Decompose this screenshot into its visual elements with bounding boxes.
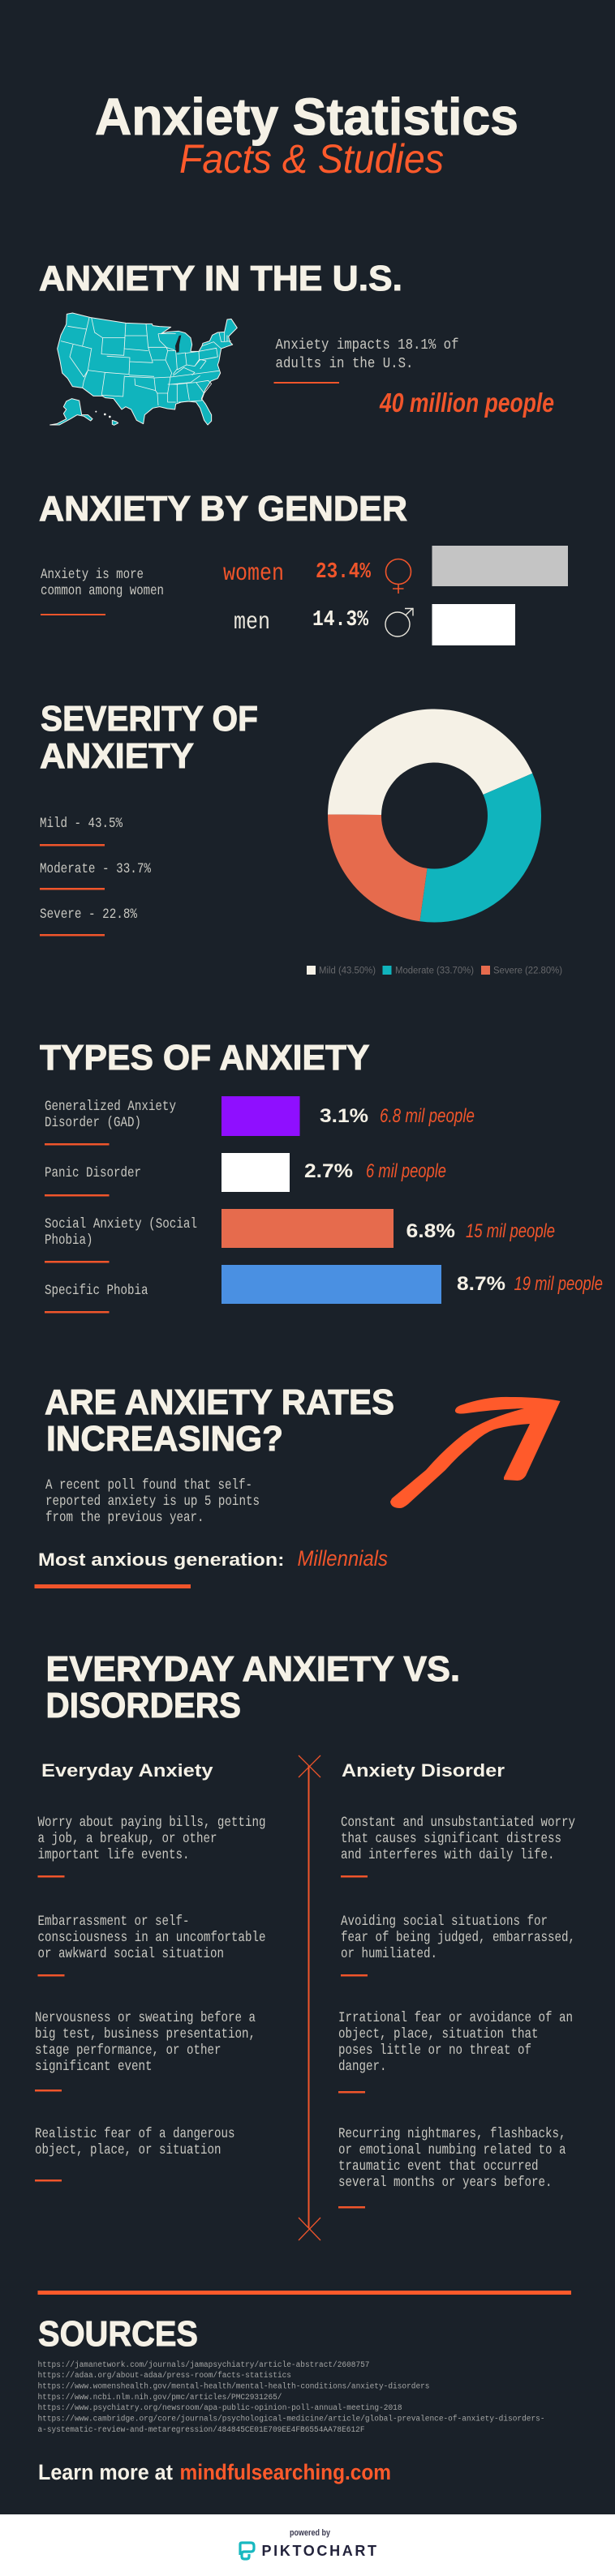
title: Facts & Studies xyxy=(179,136,444,182)
right item 1: that causes significant distress xyxy=(341,1831,561,1847)
left item 3: stage performance, or other xyxy=(35,2042,221,2059)
footer band: PIKTOCHART xyxy=(261,2543,376,2559)
type: social anxiety: 6.8% xyxy=(406,1220,455,1242)
right item 2: Avoiding social situations for xyxy=(341,1914,548,1930)
left item 4: Realistic fear of a dangerous xyxy=(35,2126,235,2142)
left item 3 xyxy=(35,2010,256,2092)
chart legend: Severe (22.80%) xyxy=(493,967,562,976)
type: specific phobia xyxy=(45,1265,603,1314)
heading: severity of anxiety: ANXIETY xyxy=(40,736,194,776)
sources list: https://www.womenshealth.gov/mental-health/mental-health-conditions/anxiety-disorders xyxy=(37,2382,430,2392)
left item 3: big test, business presentation, xyxy=(35,2026,256,2042)
type: GAD xyxy=(45,1096,475,1145)
type: specific phobia: Specific Phobia xyxy=(45,1283,148,1299)
type: GAD: Generalized Anxiety xyxy=(45,1099,176,1115)
right item 3 xyxy=(338,2010,573,2094)
heading: are anxiety rates increasing xyxy=(45,1382,394,1459)
men row xyxy=(234,604,515,645)
left item 1: Worry about paying bills, getting xyxy=(37,1815,266,1831)
left item 4: object, place, or situation xyxy=(35,2142,221,2158)
text block: recent poll: from the previous year. xyxy=(45,1510,204,1526)
type: panic disorder: Panic Disorder xyxy=(45,1165,141,1181)
footer band xyxy=(0,2514,615,2576)
column headings: Everyday Anxiety xyxy=(41,1760,213,1781)
text block: recent poll: reported anxiety is up 5 points xyxy=(45,1494,260,1510)
icon: female symbol xyxy=(386,559,411,594)
right item 3: poses little or no threat of xyxy=(338,2042,531,2059)
text block: recent poll: A recent poll found that self- xyxy=(45,1477,252,1494)
left item 2: Embarrassment or self- xyxy=(37,1914,190,1930)
sources list: a-systematic-review-and-metaregression/484845CE01E709EE4FB6554AA78E612F xyxy=(37,2425,365,2435)
type: specific phobia: 8.7% xyxy=(457,1273,505,1295)
heading: everyday anxiety vs. disorders xyxy=(45,1649,460,1725)
text block: gender note: Anxiety is more xyxy=(41,567,144,583)
right item 4: Recurring nightmares, flashbacks, xyxy=(338,2126,566,2142)
text block: anxiety impact: adults in the U.S. xyxy=(276,355,414,372)
icon: piktochart logo xyxy=(240,2543,254,2559)
most anxious generation xyxy=(34,1546,388,1588)
title: Anxiety Statistics xyxy=(95,88,518,146)
heading: severity of anxiety xyxy=(40,699,258,776)
sources list: https://jamanetwork.com/journals/jamapsychiatry/article-abstract/2608757 xyxy=(37,2360,370,2370)
text block: gender note xyxy=(41,567,164,615)
icon: male symbol xyxy=(385,608,413,636)
heading: everyday anxiety vs. disorders: EVERYDAY ANXIETY VS. xyxy=(45,1649,460,1689)
right item 3: danger. xyxy=(338,2059,386,2075)
heading: everyday anxiety vs. disorders: DISORDERS xyxy=(45,1686,241,1725)
icon: US map xyxy=(50,313,237,425)
left item 2: or awkward social situation xyxy=(37,1946,224,1962)
type: social anxiety: 15 mil people xyxy=(466,1220,555,1242)
type: GAD: Disorder (GAD) xyxy=(45,1115,141,1131)
sources list: https://adaa.org/about-adaa/press-room/facts-statistics xyxy=(37,2371,291,2381)
learn more link xyxy=(38,2460,391,2484)
center divider with crosses xyxy=(299,1755,320,2240)
heading: types of anxiety: TYPES OF ANXIETY xyxy=(40,1038,370,1078)
left item 1: a job, a breakup, or other xyxy=(37,1831,217,1847)
severity list xyxy=(40,816,151,936)
heading: severity of anxiety: SEVERITY OF xyxy=(41,699,258,739)
heading: are anxiety rates increasing: INCREASING? xyxy=(46,1419,283,1459)
column headings xyxy=(41,1760,505,1781)
left item 2 xyxy=(37,1914,266,1977)
type: social anxiety: Phobia) xyxy=(45,1232,92,1249)
text block: anxiety impact: Anxiety impacts 18.1% of xyxy=(276,336,459,354)
women row: 23.4% xyxy=(316,560,372,585)
right item 2: or humiliated. xyxy=(341,1946,437,1962)
left item 1 xyxy=(37,1815,266,1878)
type: social anxiety xyxy=(45,1209,555,1263)
callout: 40 million people: 40 million people xyxy=(379,388,554,418)
right item 4: or emotional numbing related to a xyxy=(338,2142,566,2158)
sources list: https://www.psychiatry.org/newsroom/apa-public-opinion-poll-annual-meeting-2018 xyxy=(37,2403,402,2413)
severity list: Severe - 22.8% xyxy=(40,907,137,923)
left item 3: Nervousness or sweating before a xyxy=(35,2010,256,2026)
men row: men xyxy=(234,609,270,636)
left item 3: significant event xyxy=(35,2059,153,2075)
text block: recent poll xyxy=(45,1477,260,1526)
right item 4 xyxy=(338,2126,566,2209)
text block: anxiety impact xyxy=(274,336,459,384)
type: GAD: 6.8 mil people xyxy=(380,1105,475,1127)
learn more link: Learn more at xyxy=(38,2460,173,2484)
footer band: powered by xyxy=(290,2528,331,2538)
chart legend: Moderate (33.70%) xyxy=(395,967,474,976)
most anxious generation: Most anxious generation: xyxy=(38,1549,284,1570)
heading: sources: SOURCES xyxy=(38,2314,198,2354)
heading: anxiety by gender: ANXIETY BY GENDER xyxy=(39,489,407,529)
severity list: Moderate - 33.7% xyxy=(40,861,151,877)
donut chart xyxy=(328,709,541,923)
heading: anxiety in the U.S.: ANXIETY IN THE U.S. xyxy=(39,259,402,298)
right item 4: several months or years before. xyxy=(338,2175,552,2191)
right item 1: and interferes with daily life. xyxy=(341,1847,555,1863)
chart legend: Mild (43.50%) xyxy=(319,967,376,976)
sources divider xyxy=(37,2291,571,2295)
left item 2: consciousness in an uncomfortable xyxy=(37,1930,266,1946)
right item 3: object, place, situation that xyxy=(338,2026,539,2042)
title xyxy=(95,88,518,182)
column headings: Anxiety Disorder xyxy=(342,1760,505,1781)
sources list: https://www.cambridge.org/core/journals/psychological-medicine/article/global-prevalence-of-anxiety-disorders- xyxy=(37,2415,545,2424)
sources list xyxy=(37,2360,545,2435)
type: social anxiety: Social Anxiety (Social xyxy=(45,1216,197,1232)
women row xyxy=(223,546,568,594)
right item 4: traumatic event that occurred xyxy=(338,2158,539,2175)
learn more link: mindfulsearching.com xyxy=(180,2460,391,2484)
women row: women xyxy=(223,560,284,588)
left item 4 xyxy=(35,2126,235,2181)
sources list: https://www.ncbi.nlm.nih.gov/pmc/articles/PMC2931265/ xyxy=(37,2393,282,2402)
icon: rising arrow xyxy=(390,1397,560,1508)
text block: gender note: common among women xyxy=(41,583,164,599)
right item 2 xyxy=(341,1914,575,1977)
type: panic disorder: 2.7% xyxy=(304,1160,353,1182)
type: GAD: 3.1% xyxy=(320,1105,368,1127)
men row: 14.3% xyxy=(312,608,369,632)
heading: are anxiety rates increasing: ARE ANXIETY RATES xyxy=(45,1382,394,1422)
severity list: Mild - 43.5% xyxy=(40,816,123,832)
left item 1: important life events. xyxy=(37,1847,190,1863)
type: panic disorder: 6 mil people xyxy=(366,1160,446,1182)
chart legend xyxy=(307,966,562,976)
type: panic disorder xyxy=(45,1153,446,1197)
most anxious generation: Millennials xyxy=(297,1546,388,1571)
right item 1 xyxy=(341,1815,575,1878)
